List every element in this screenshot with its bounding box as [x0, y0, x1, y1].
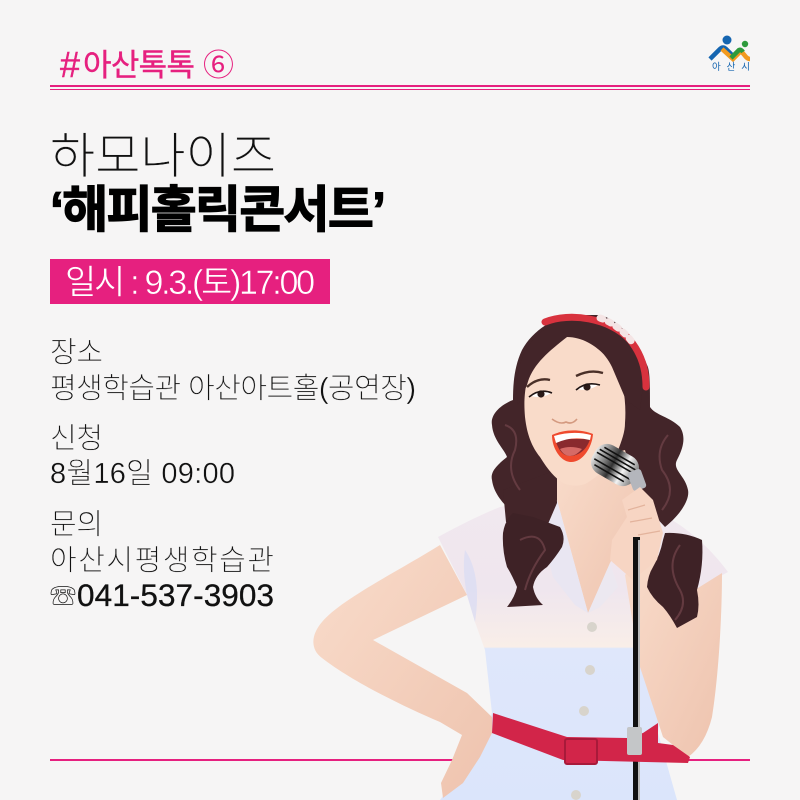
hair waves [505, 425, 683, 620]
header tag: # [60, 44, 80, 85]
dress [438, 497, 728, 800]
details text [50, 337, 416, 613]
headband [545, 317, 646, 387]
details text: ☏ [50, 581, 76, 611]
microphone [586, 439, 647, 492]
mouth [552, 430, 593, 462]
header rule [50, 85, 750, 90]
hair lock right [647, 533, 702, 628]
header tag: 아산톡톡 [83, 48, 195, 83]
sleeve shading [464, 550, 477, 622]
hand [610, 487, 663, 580]
hair back [492, 315, 688, 527]
date badge: 일시 : 9.3.(토)17:00 [65, 264, 315, 302]
collar [537, 500, 588, 613]
title line 1: 하모나이즈 [50, 130, 276, 184]
left arm [313, 545, 492, 798]
stand [633, 537, 640, 800]
details text: 아산시평생학습관 [50, 545, 274, 577]
header tag: ⑥ [203, 48, 234, 83]
brows [527, 372, 603, 387]
logo: Asan city [710, 36, 750, 73]
buttons [571, 622, 597, 800]
neck and chest [557, 450, 640, 613]
hair lock left [503, 513, 564, 607]
coupling [627, 727, 642, 755]
bottom rule [50, 759, 750, 761]
logo: Asan city: 아 산 시 [712, 62, 750, 73]
details text: 평생학습관 아산아트홀(공연장) [50, 372, 416, 405]
details text: 장소 [50, 337, 103, 369]
details text: 문의 [50, 509, 103, 541]
details text: 신청 [50, 423, 103, 455]
belt [492, 713, 690, 764]
eyes [529, 383, 600, 398]
header tag [60, 44, 234, 85]
hair top [517, 318, 645, 410]
details text: 041-537-3903 [77, 577, 274, 613]
singer illustration [313, 315, 728, 800]
face [524, 337, 625, 486]
hair bridge [503, 470, 557, 524]
nose [552, 419, 577, 423]
right arm [625, 545, 722, 757]
details text: 8월16일 09:00 [50, 458, 235, 490]
title line 2: ‘해피홀릭콘서트’ [50, 182, 386, 238]
